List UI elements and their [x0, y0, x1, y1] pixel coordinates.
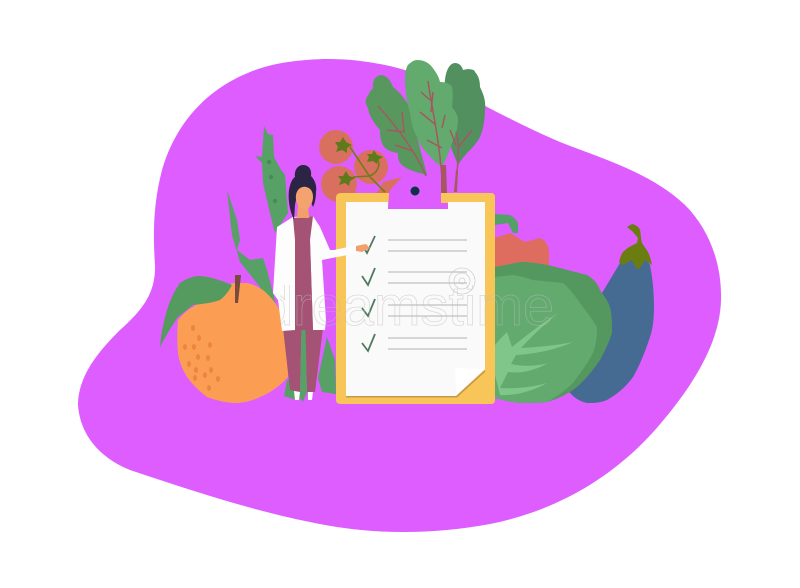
- clipboard: [336, 193, 495, 404]
- cabbage: [495, 262, 612, 403]
- checklist lines: [388, 240, 467, 349]
- clip hole: [410, 186, 420, 196]
- eggplant: [568, 224, 654, 403]
- check marks: [362, 236, 375, 351]
- leaf veins: [378, 81, 472, 192]
- orange leaf: [160, 276, 232, 347]
- shoes: [294, 391, 313, 400]
- leaf behind doctor legs: [284, 337, 336, 400]
- trousers: [283, 307, 323, 392]
- back leaf: lower aloe: [227, 190, 278, 320]
- watermark logo: [449, 268, 475, 294]
- left leaf: [366, 75, 427, 175]
- bell pepper: [495, 214, 549, 270]
- dress top: [293, 216, 313, 330]
- face: [296, 187, 313, 210]
- white coat: [273, 216, 358, 331]
- right leaf: [440, 63, 485, 165]
- cherry tomatoes: [319, 130, 402, 202]
- clipboard board: [336, 193, 495, 404]
- purple clip of clipboard: [388, 178, 441, 209]
- watermark: dreamstime: [262, 274, 554, 337]
- orange fruit: [160, 275, 288, 403]
- leaf stems: [441, 165, 458, 193]
- purple background blob: [78, 59, 721, 532]
- back leaf: tall aloe: [255, 126, 288, 233]
- infographic illustration: [78, 59, 722, 532]
- paper shadow: [346, 370, 485, 398]
- hair: [289, 165, 316, 220]
- leafy greens: [366, 60, 485, 192]
- folded corner: [455, 368, 485, 395]
- middle leaf: [405, 60, 458, 167]
- orange stem: [235, 275, 241, 303]
- hand: [356, 244, 370, 252]
- neck: [297, 205, 309, 218]
- doctor figure: [273, 165, 370, 402]
- paper sheet: [346, 202, 485, 396]
- centre leaf between legs: [298, 307, 307, 402]
